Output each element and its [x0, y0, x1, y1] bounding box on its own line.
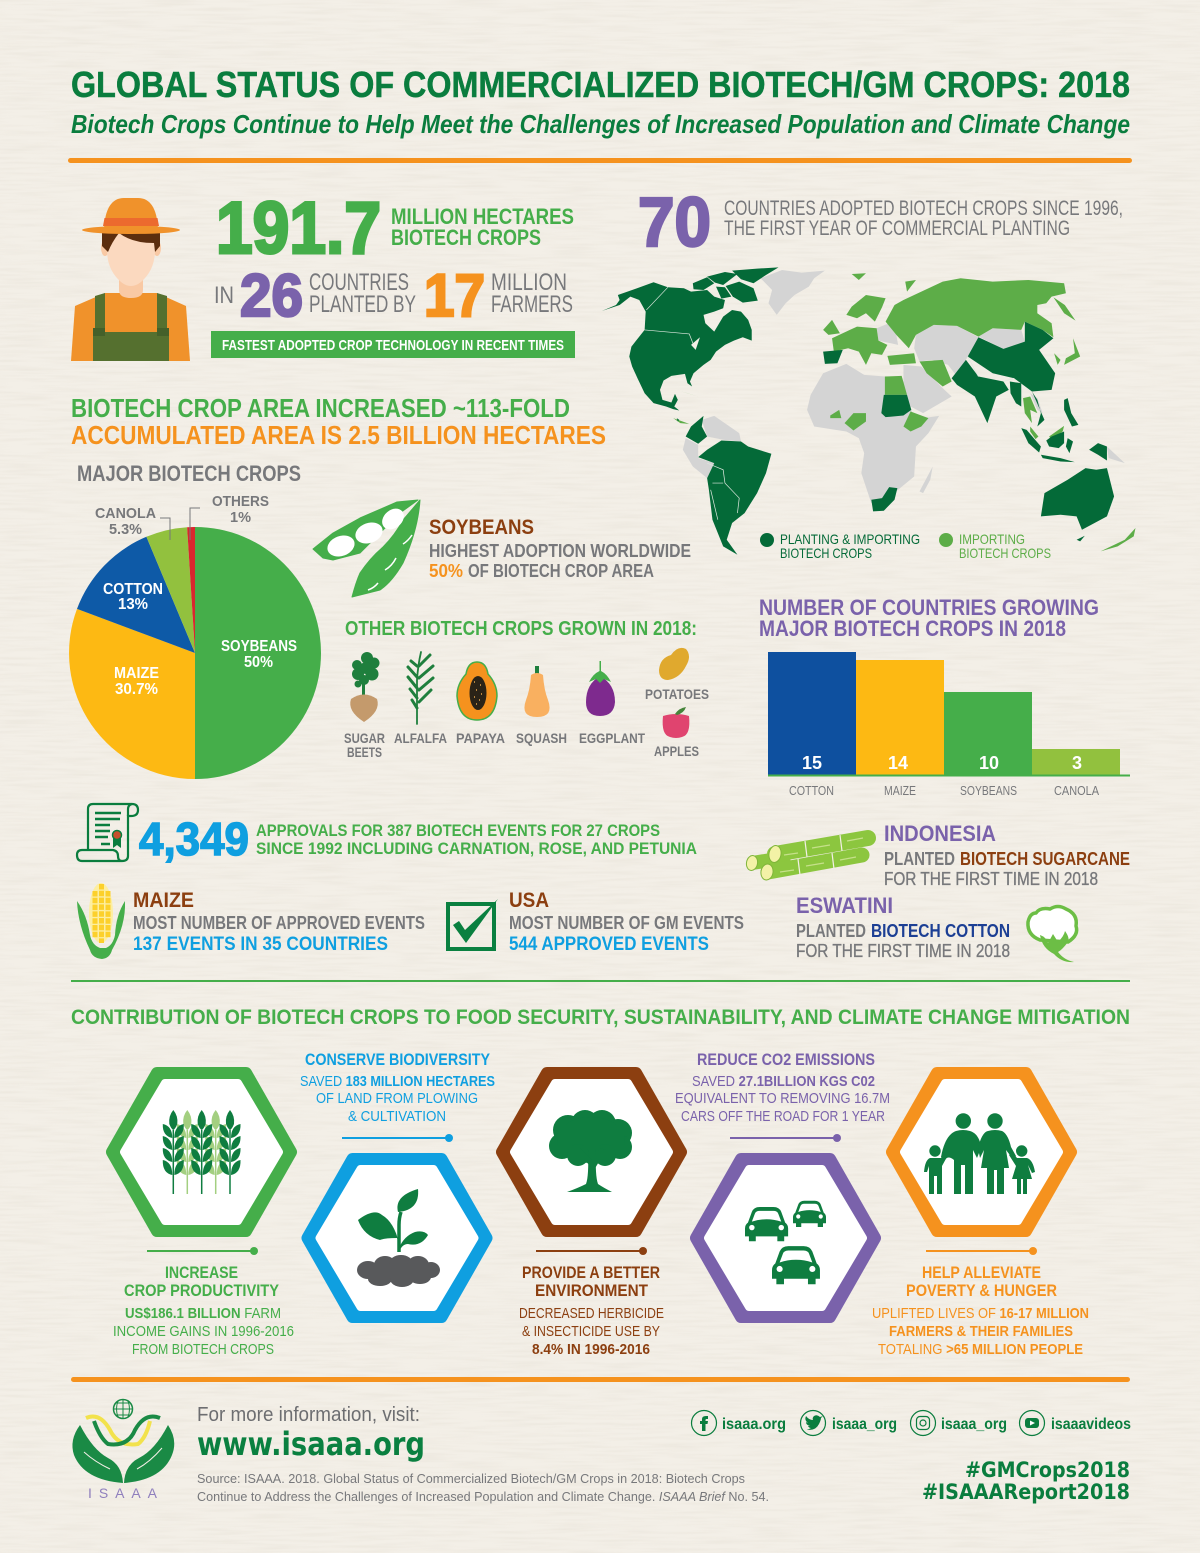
text: productivity: INCREASE — [165, 1263, 238, 1282]
footer: more information: Continue to Address the Challenges of Increased Population and Climate Change. ISAAA Brief No. 54. — [197, 1489, 769, 1504]
footer: more information: www.isaaa.org — [197, 1425, 425, 1463]
stat: 26 countries, 17 million farmers: FARMERS — [491, 291, 573, 318]
text: environment: & INSECTICIDE USE BY — [522, 1323, 660, 1340]
pie chart: major biotech crops: COTTON — [103, 581, 163, 598]
stat: 26 countries, 17 million farmers: PLANTED BY — [309, 291, 416, 318]
text: soybeans: SOYBEANS — [429, 516, 534, 539]
bar chart: countries per crop: MAIZE — [884, 783, 916, 798]
icon: approval scroll — [77, 804, 138, 861]
panel: conserve biodiversity — [300, 1050, 495, 1317]
text: environment: PROVIDE A BETTER — [522, 1263, 660, 1282]
text: Eswatini: BIOTECH COTTON — [871, 921, 1010, 941]
footer: more information: Source: ISAAA. 2018. Global Status of Commercialized Biotech/GM Crops in 2018: Biotech Crops — [197, 1471, 745, 1486]
label: apples: APPLES — [654, 743, 699, 759]
text: productivity: FROM BIOTECH CROPS — [132, 1341, 274, 1358]
text: poverty: UPLIFTED LIVES OF 16-17 MILLION — [872, 1305, 1089, 1322]
panel: help alleviate poverty — [872, 1073, 1089, 1358]
map legend: BIOTECH CROPS — [959, 545, 1051, 561]
stat: 191.7 million hectares — [216, 188, 574, 269]
icon: facebook — [692, 1410, 716, 1436]
text: maize events — [133, 889, 425, 955]
bar chart: countries per crop: 15 — [802, 753, 822, 773]
pie chart: major biotech crops: OTHERS — [212, 493, 269, 510]
pie chart: major biotech crops: 30.7% — [115, 681, 158, 698]
stat: 4,349 approvals: APPROVALS FOR 387 BIOTECH EVENTS FOR 27 CROPS — [256, 821, 660, 840]
text: poverty — [872, 1247, 1089, 1358]
icon: family — [924, 1113, 1035, 1194]
text: environment: ENVIRONMENT — [535, 1281, 649, 1300]
hexagon: brown — [502, 1073, 681, 1231]
icon: papaya — [457, 662, 497, 720]
stat: 26 countries, 17 million farmers: 26 — [240, 262, 303, 329]
Light green: importing — [673, 273, 1136, 551]
hexagon: blue — [308, 1159, 486, 1317]
stat: 70 countries: 70 — [638, 183, 711, 261]
heading: other biotech crops: OTHER BIOTECH CROPS GROWN IN 2018: — [345, 618, 697, 640]
icon: apple — [663, 707, 689, 738]
icon: tree — [549, 1110, 632, 1192]
text: biodiversity — [300, 1050, 495, 1142]
text: emissions: REDUCE CO2 EMISSIONS — [697, 1050, 875, 1069]
text: soybeans — [429, 516, 691, 581]
world map — [602, 267, 1136, 555]
footer: more information — [197, 1404, 769, 1504]
text: productivity — [113, 1247, 294, 1358]
label: squash: SQUASH — [516, 730, 567, 746]
icon: maize — [77, 883, 125, 959]
icon: youtube — [1020, 1410, 1044, 1436]
footer: more information: For more information, visit: — [197, 1404, 420, 1426]
text: biodiversity: & CULTIVATION — [348, 1108, 446, 1125]
heading: crop area increased: BIOTECH CROP AREA INCREASED ~113-FOLD — [71, 393, 570, 423]
social links: isaaa.org — [722, 1416, 786, 1433]
text: emissions — [675, 1050, 890, 1142]
hexagon: purple — [696, 1159, 875, 1317]
stat: 70 countries — [638, 183, 1123, 261]
text: soybeans: OF BIOTECH CROP AREA — [468, 561, 654, 581]
text: Indonesia: BIOTECH SUGARCANE — [960, 849, 1130, 869]
text: poverty: HELP ALLEVIATE — [922, 1263, 1041, 1282]
heading: contribution: CONTRIBUTION OF BIOTECH CROPS TO FOOD SECURITY, SUSTAINABILITY, AND CLIMATE CHANGE MITIGATION — [71, 1006, 1130, 1029]
bar chart: countries per crop — [768, 652, 1130, 798]
text: poverty: FARMERS & THEIR FAMILIES — [889, 1323, 1073, 1340]
label: sugar beets — [344, 730, 385, 760]
label: alfalfa: ALFALFA — [394, 730, 447, 746]
icon: eggplant — [586, 661, 615, 716]
text: soybeans: HIGHEST ADOPTION WORLDWIDE — [429, 541, 691, 561]
map legend: BIOTECH CROPS — [780, 545, 872, 561]
pie chart: major biotech crops — [69, 493, 321, 779]
social links: isaaa_org — [832, 1416, 897, 1433]
text: emissions: CARS OFF THE ROAD FOR 1 YEAR — [681, 1108, 885, 1125]
hashtags — [922, 1458, 1130, 1504]
bar chart: countries per crop: 10 — [979, 753, 999, 773]
hexagon: orange — [892, 1073, 1071, 1231]
stat: 4,349 approvals: SINCE 1992 INCLUDING CARNATION, ROSE, AND PETUNIA — [256, 839, 697, 858]
stat: 191.7 million hectares: 191.7 — [216, 188, 381, 269]
text: Eswatini — [796, 893, 1010, 961]
stat: 4,349 approvals — [139, 813, 697, 865]
bar chart: countries per crop: 14 — [888, 753, 908, 773]
logo: ISAAA — [72, 1400, 174, 1501]
social links: isaaa_org — [941, 1416, 1007, 1433]
stat: 191.7 million hectares: MILLION HECTARES — [391, 204, 574, 229]
stat: 26 countries, 17 million farmers: MILLION — [491, 269, 567, 296]
stat: 26 countries, 17 million farmers: IN — [214, 282, 234, 309]
panel: increase crop productivity — [112, 1073, 294, 1358]
text: poverty: TOTALING >65 MILLION PEOPLE — [878, 1341, 1083, 1358]
Great Lakes and map borders — [645, 287, 1014, 520]
icon: sugarcane — [745, 835, 868, 881]
icon: farmer — [71, 198, 190, 361]
icon: potato — [659, 648, 689, 680]
text: Indonesia: PLANTED — [884, 849, 955, 869]
stat: 26 countries, 17 million farmers: COUNTRIES — [309, 269, 409, 296]
pie chart: major biotech crops: 50% — [244, 654, 273, 671]
icon: cars — [745, 1201, 826, 1284]
text: maize events: MAIZE — [133, 889, 194, 912]
pie chart: major biotech crops: 1% — [230, 509, 251, 526]
text: Eswatini: FOR THE FIRST TIME IN 2018 — [796, 941, 1010, 961]
icon: instagram — [910, 1410, 936, 1436]
social links — [692, 1410, 1131, 1436]
logo: ISAAA: ISAAA — [88, 1485, 158, 1501]
heading: number of countries: MAJOR BIOTECH CROPS IN 2018 — [759, 616, 1066, 641]
text: biodiversity: CONSERVE BIODIVERSITY — [305, 1050, 491, 1069]
text: emissions: SAVED 27.1BILLION KGS C02 — [692, 1073, 875, 1090]
text: USA events: MOST NUMBER OF GM EVENTS — [509, 913, 744, 933]
text: Indonesia — [884, 821, 1130, 889]
panel: provide a better environment — [502, 1073, 681, 1358]
bar chart: countries per crop: 3 — [1072, 753, 1082, 773]
icon: cotton boll — [1028, 906, 1077, 962]
map legend: PLANTING & IMPORTING — [780, 531, 920, 547]
heading: number of countries: NUMBER OF COUNTRIES GROWING — [759, 595, 1099, 620]
pie chart: major biotech crops: SOYBEANS — [221, 638, 297, 655]
pie chart: major biotech crops: CANOLA — [95, 505, 156, 522]
text: biodiversity: OF LAND FROM PLOWING — [316, 1090, 478, 1107]
text: Eswatini: ESWATINI — [796, 893, 893, 918]
stat: 26 countries, 17 million farmers: 17 — [424, 262, 485, 329]
hashtags: #GMCrops2018 — [965, 1458, 1130, 1482]
Grey: non-adopting land — [683, 270, 1125, 503]
icon: squash — [524, 666, 550, 717]
icon: alfalfa — [408, 652, 433, 724]
bar chart: countries per crop: SOYBEANS — [960, 783, 1017, 798]
text: USA events — [509, 889, 744, 955]
text: maize events: MOST NUMBER OF APPROVED EVENTS — [133, 913, 425, 933]
text: soybeans: 50% — [429, 561, 463, 581]
text: emissions: EQUIVALENT TO REMOVING 16.7M — [675, 1090, 890, 1107]
text: environment — [519, 1247, 664, 1358]
pie chart: major biotech crops: MAIZE — [114, 665, 159, 682]
icon: check box — [448, 899, 498, 949]
stat: 70 countries: THE FIRST YEAR OF COMMERCIAL PLANTING — [724, 217, 1070, 240]
text: environment: DECREASED HERBICIDE — [519, 1305, 664, 1322]
map legend — [760, 531, 1051, 561]
bar chart: countries per crop: CANOLA — [1054, 783, 1099, 798]
hexagon: green — [112, 1073, 291, 1231]
stat: 4,349 approvals: 4,349 — [139, 813, 249, 865]
map legend: IMPORTING — [959, 531, 1025, 547]
banner: fastest adopted: FASTEST ADOPTED CROP TECHNOLOGY IN RECENT TIMES — [222, 337, 564, 354]
text: environment: 8.4% IN 1996-2016 — [532, 1341, 650, 1358]
text: maize events: 137 EVENTS IN 35 COUNTRIES — [133, 934, 388, 955]
text: USA events: 544 APPROVED EVENTS — [509, 934, 709, 955]
social links: isaaavideos — [1051, 1416, 1131, 1433]
label: potatoes: POTATOES — [645, 686, 709, 702]
icon: twitter — [800, 1410, 826, 1436]
hashtags: #ISAAAReport2018 — [922, 1480, 1130, 1504]
heading: major biotech crops: MAJOR BIOTECH CROPS — [77, 461, 301, 486]
text: productivity: INCOME GAINS IN 1996-2016 — [113, 1323, 294, 1340]
text: poverty: POVERTY & HUNGER — [906, 1281, 1057, 1300]
heading: crop area increased — [71, 393, 606, 450]
bar chart: countries per crop: COTTON — [789, 783, 834, 798]
heading: number of countries — [759, 595, 1099, 641]
pie chart: major biotech crops: 5.3% — [109, 521, 142, 538]
text: USA events: USA — [509, 889, 549, 912]
label: eggplant: EGGPLANT — [579, 730, 645, 746]
text: Indonesia: INDONESIA — [884, 821, 996, 846]
text: productivity: CROP PRODUCTIVITY — [124, 1281, 280, 1300]
heading: crop area increased: ACCUMULATED AREA IS 2.5 BILLION HECTARES — [71, 420, 606, 450]
banner: fastest adopted — [211, 331, 575, 358]
icon: sugar beets — [350, 652, 380, 722]
icon: seedling — [357, 1189, 440, 1287]
icon: soybean pods — [313, 500, 420, 597]
pie chart: major biotech crops: 13% — [118, 596, 148, 613]
text: biodiversity: SAVED 183 MILLION HECTARES — [300, 1073, 495, 1090]
stat: 26 countries, 17 million farmers — [214, 262, 573, 329]
Dark green: planting and importing — [602, 267, 1114, 555]
stat: 191.7 million hectares: BIOTECH CROPS — [391, 225, 541, 250]
label: papaya: PAPAYA — [456, 730, 505, 746]
text: Eswatini: PLANTED — [796, 921, 866, 941]
text: productivity: US$186.1 BILLION FARM — [125, 1305, 281, 1322]
label: sugar beets: BEETS — [347, 744, 382, 760]
label: sugar beets: SUGAR — [344, 730, 385, 746]
panel: reduce CO2 emissions — [675, 1050, 890, 1317]
icon: wheat — [163, 1110, 241, 1194]
text: Indonesia: FOR THE FIRST TIME IN 2018 — [884, 869, 1098, 889]
